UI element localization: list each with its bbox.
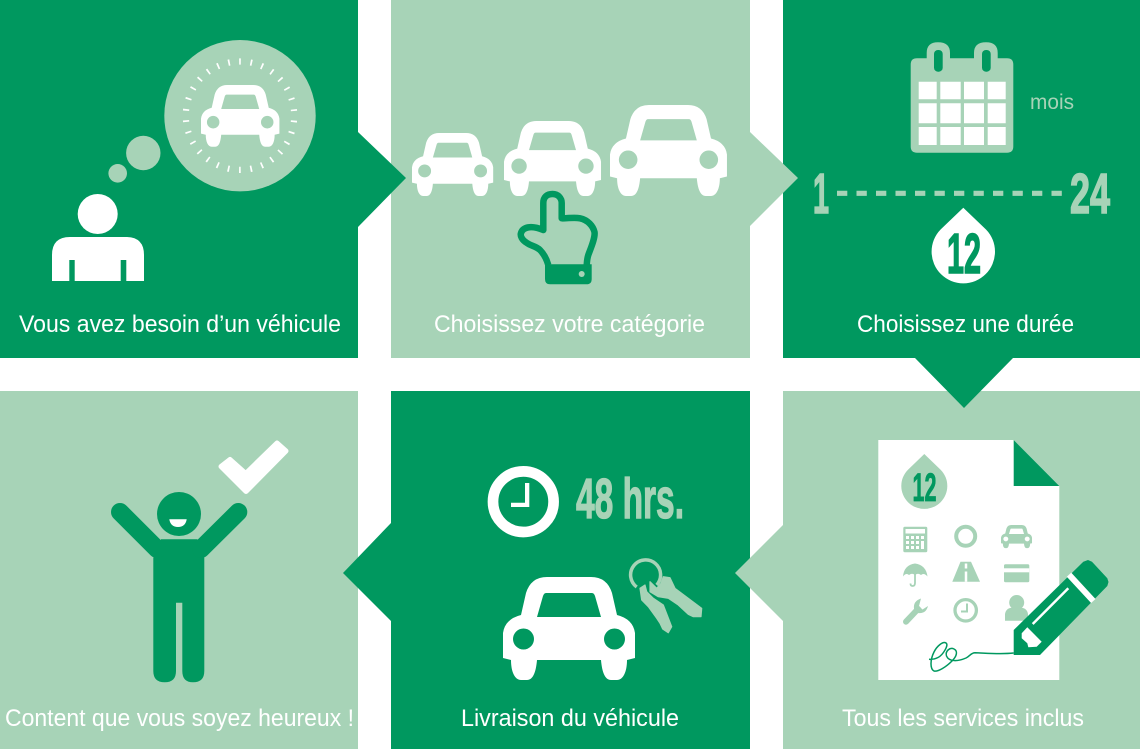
icon: drop with 12: 12 [947, 222, 981, 286]
icon: small car [1001, 525, 1032, 548]
arrow: to delivery [735, 525, 783, 621]
icon: ring [956, 527, 975, 546]
text: mois: mois [1030, 91, 1074, 114]
label: services: Tous les services inclus [842, 705, 1084, 732]
label: livraison: Livraison du véhicule [461, 705, 679, 732]
arrow: to category [358, 132, 406, 227]
icon: car in bubble [201, 85, 279, 147]
panel: choose category [391, 0, 798, 358]
icon: car [503, 577, 635, 680]
icon: pointing hand [521, 194, 595, 284]
icon: check mark [221, 443, 286, 492]
icon: happy person [120, 492, 238, 682]
label: content: Content que vous soyez heureux ! [5, 705, 354, 732]
icon: pencil [1014, 560, 1108, 655]
label: categorie: Choisissez votre catégorie [434, 311, 705, 338]
icon: large car [610, 105, 727, 196]
label: duree: Choisissez une durée [857, 311, 1074, 338]
icon: medium car [504, 121, 601, 196]
icon: wrench [906, 598, 928, 622]
duration scale: 1 [813, 162, 829, 226]
icon: small drop with 12 [901, 454, 947, 510]
icon: person [52, 194, 144, 281]
icon: keys [631, 560, 702, 633]
panel: included services [735, 391, 1140, 749]
icon: small person [1005, 595, 1028, 621]
duration scale: 24 [1070, 162, 1110, 226]
icon: umbrella [903, 564, 928, 586]
icon: small car [412, 133, 493, 196]
icon: small clock [955, 600, 976, 621]
label: besoin: Vous avez besoin d’un véhicule [19, 311, 341, 338]
icon: thought bubble [108, 40, 316, 191]
icon: drop with 12 [932, 208, 995, 286]
icon: calculator [903, 527, 927, 552]
icon: clock [493, 471, 554, 532]
icon: card [1004, 564, 1029, 582]
arrow: to services [915, 358, 1013, 408]
icon: road [952, 562, 980, 582]
icon: calendar [911, 42, 1013, 153]
icon: small drop with 12: 12 [912, 466, 936, 510]
icon: signature [929, 643, 1014, 671]
panel: choose duration [783, 0, 1140, 408]
panel: happy customer [0, 391, 358, 749]
arrow: to happy customer [343, 523, 391, 621]
panel: delivery [343, 391, 750, 749]
arrow: to duration [750, 132, 798, 226]
text: 48 hrs: 48 hrs. [576, 467, 684, 531]
panel: need a vehicle [0, 0, 406, 358]
duration scale [813, 162, 1110, 226]
icon: contract [878, 440, 1108, 680]
